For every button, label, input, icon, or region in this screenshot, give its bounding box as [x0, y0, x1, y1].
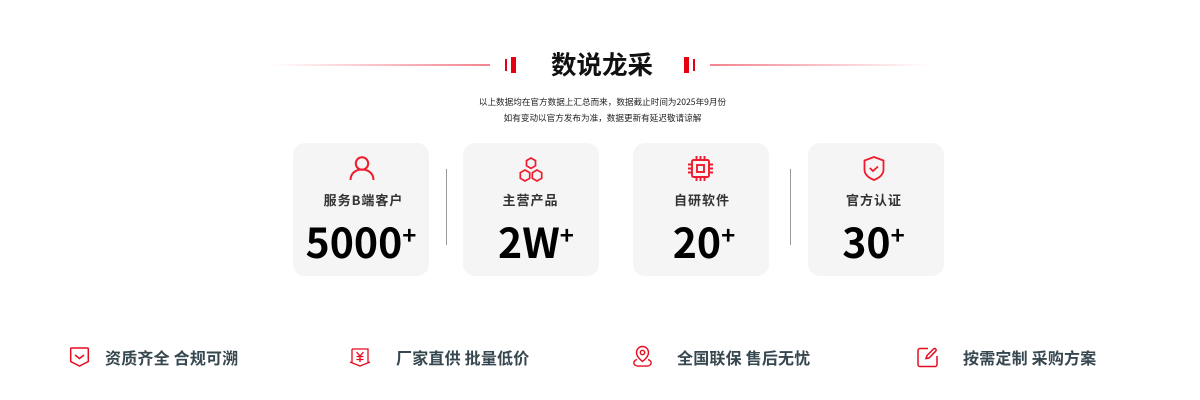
feature: qualification — [70, 345, 238, 369]
header bars left — [505, 57, 516, 73]
icon: chip — [688, 156, 713, 181]
number: 30+ — [842, 210, 905, 270]
feature: national service — [633, 345, 810, 369]
header bars right — [684, 57, 695, 73]
label: 官方认证 — [846, 190, 902, 209]
label: 主营产品 — [502, 190, 558, 209]
text: 厂家直供 批量低价 — [396, 345, 529, 369]
number: 2W+ — [498, 210, 574, 270]
icon: shield check — [864, 156, 884, 181]
icon: hexagons — [519, 157, 543, 182]
panel: B-end customers — [293, 143, 429, 276]
text: 资质齐全 合规可溯 — [105, 345, 238, 369]
panel: official certification — [808, 143, 944, 276]
label: 服务B端客户 — [324, 190, 403, 209]
divider — [446, 169, 447, 245]
icon: badge check — [70, 347, 90, 367]
icon: edit note — [917, 348, 938, 368]
icon: location pin — [633, 346, 652, 367]
divider — [790, 169, 791, 245]
subtitle line 2: 如有变动以官方发布为准，数据更新有延迟敬请谅解 — [504, 112, 701, 124]
icon: person — [350, 156, 374, 180]
panel: in-house software — [633, 143, 769, 276]
header line left — [270, 64, 490, 66]
header line right — [710, 64, 930, 66]
number: 20+ — [673, 210, 735, 270]
subtitle line 1: 以上数据均在官方数据上汇总而来，数据截止时间为2025年9月份 — [479, 96, 726, 108]
panel: main products — [463, 143, 599, 276]
feature: customization — [917, 345, 1096, 369]
label: 自研软件 — [674, 190, 730, 209]
text: 全国联保 售后无忧 — [677, 345, 810, 369]
number: 5000+ — [306, 210, 416, 270]
title: 数说龙采 — [551, 45, 653, 82]
text: 按需定制 采购方案 — [963, 345, 1096, 369]
feature: factory direct — [350, 345, 529, 369]
icon: yen badge — [350, 348, 370, 367]
